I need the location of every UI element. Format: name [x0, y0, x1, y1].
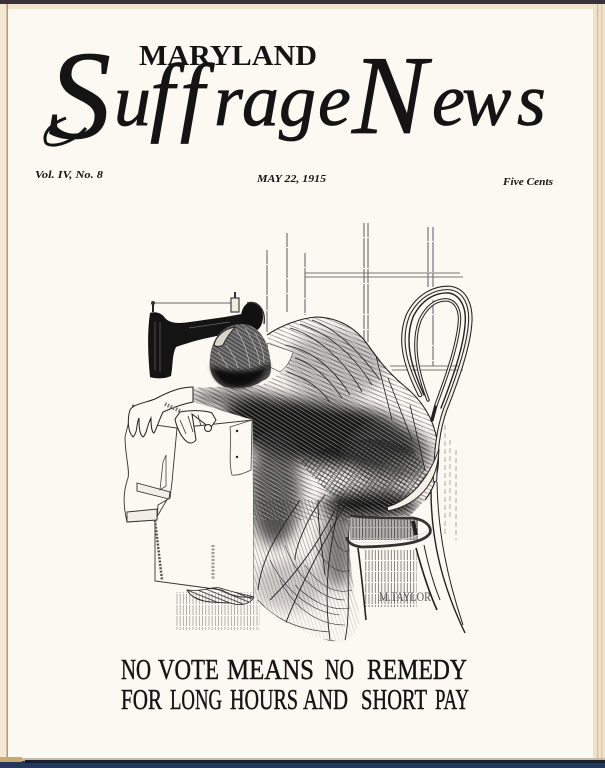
- caption line 2: HOURS: [230, 684, 298, 716]
- masthead: [35, 27, 553, 188]
- publication name: Suffrage News: g: [279, 60, 316, 142]
- shirt body: [155, 420, 254, 597]
- neck: [267, 343, 293, 372]
- publication name: Suffrage News: w: [462, 60, 511, 142]
- caption line 2: PAY: [435, 684, 469, 716]
- tone and hatching of dress: [194, 318, 436, 643]
- caption line 1: REMEDY: [367, 654, 467, 686]
- head with hair: [210, 324, 271, 388]
- back contour hatching: [285, 320, 425, 470]
- publication name: Maryland: MARYLAND: [139, 40, 317, 72]
- skirt fold strokes: [258, 495, 350, 640]
- publication name: Suffrage News: s: [517, 60, 546, 142]
- window frame: [267, 223, 463, 370]
- publication name: Suffrage News: f: [150, 48, 185, 145]
- publication name: Suffrage News: a: [242, 60, 279, 142]
- date: MAY 22, 1915: [256, 174, 326, 185]
- caption line 2: FOR: [121, 684, 162, 716]
- caption line 2: LONG: [170, 684, 222, 716]
- shirt placket: [230, 420, 252, 475]
- artist signature: M.TAYLOR: [379, 590, 432, 604]
- illustration: exhausted seamstress at sewing machine: [124, 223, 470, 650]
- caption line 2: SHORT: [361, 684, 427, 716]
- publication name: Suffrage News: f: [180, 48, 215, 145]
- publication name: Suffrage News: u: [114, 60, 151, 142]
- shirt sleeve: [124, 405, 177, 522]
- price: Five Cents: [502, 177, 553, 188]
- chair arm brace: [387, 449, 439, 511]
- woman's figure: [194, 316, 440, 643]
- chair back loop: [403, 288, 470, 480]
- shadow below seat: [365, 549, 417, 607]
- caption: [121, 654, 469, 716]
- caption line 2: AND: [303, 684, 348, 716]
- hands and wrist: [128, 387, 216, 443]
- publication name: Suffrage News: r: [214, 60, 244, 142]
- publication name: Suffrage News: S: [48, 27, 111, 166]
- caption line 2: [121, 684, 469, 716]
- chair seat hoop: [347, 516, 430, 547]
- publication name: Suffrage News: N: [351, 34, 432, 158]
- wall shading beside chair: [445, 425, 456, 540]
- caption line 1: [121, 654, 467, 686]
- back outline: [267, 317, 438, 500]
- decorative script flourish: [45, 118, 86, 145]
- caption line 1: NO: [121, 654, 151, 686]
- caption line 1: NO: [325, 654, 354, 686]
- shirt hem: [187, 588, 254, 605]
- sewing machine: [148, 292, 264, 378]
- floor shadow: [175, 592, 260, 630]
- cloth shirt: [124, 405, 260, 630]
- bentwood chair: [347, 288, 470, 633]
- publication name: Suffrage News: e: [318, 60, 351, 142]
- caption line 1: VOTE: [158, 654, 219, 686]
- volume and number: Vol. IV, No. 8: [35, 170, 104, 181]
- caption line 1: MEANS: [227, 654, 314, 686]
- chair legs: [358, 482, 465, 633]
- publication name: Suffrage News: e: [432, 60, 465, 142]
